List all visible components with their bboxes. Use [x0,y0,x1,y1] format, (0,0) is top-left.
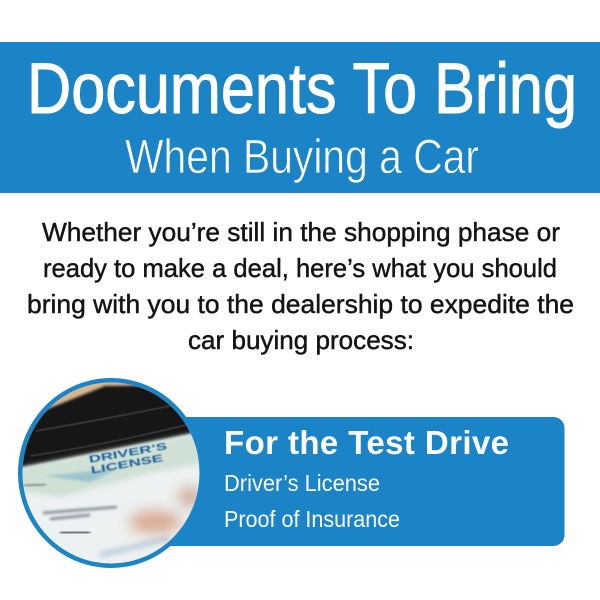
tan background [39,382,183,420]
circular photo: driver's license in wallet [18,378,200,568]
card security band [10,434,210,497]
license label: DRIVER’S [88,440,168,466]
license label: LICENSE [90,452,164,477]
subtitle: When Buying a Car [125,131,479,184]
intro text block: Whether you’re still in the shopping phase or [42,217,560,247]
panel: for the test drive [120,417,564,546]
item: proof of insurance: Proof of Insurance [224,506,400,532]
blurred card details [43,507,117,519]
intro text block [27,217,574,355]
license label [88,442,168,474]
panel heading: For the Test Drive [224,424,509,461]
item: driver's license: Driver’s License [224,470,380,496]
black wallet [22,384,192,469]
blurred portrait [129,511,181,533]
intro text block: ready to make a deal, here’s what you should [43,253,557,283]
intro text block: car buying process: [188,325,414,355]
intro text block: bring with you to the dealership to expedite the [27,289,574,319]
header banner [0,42,600,193]
